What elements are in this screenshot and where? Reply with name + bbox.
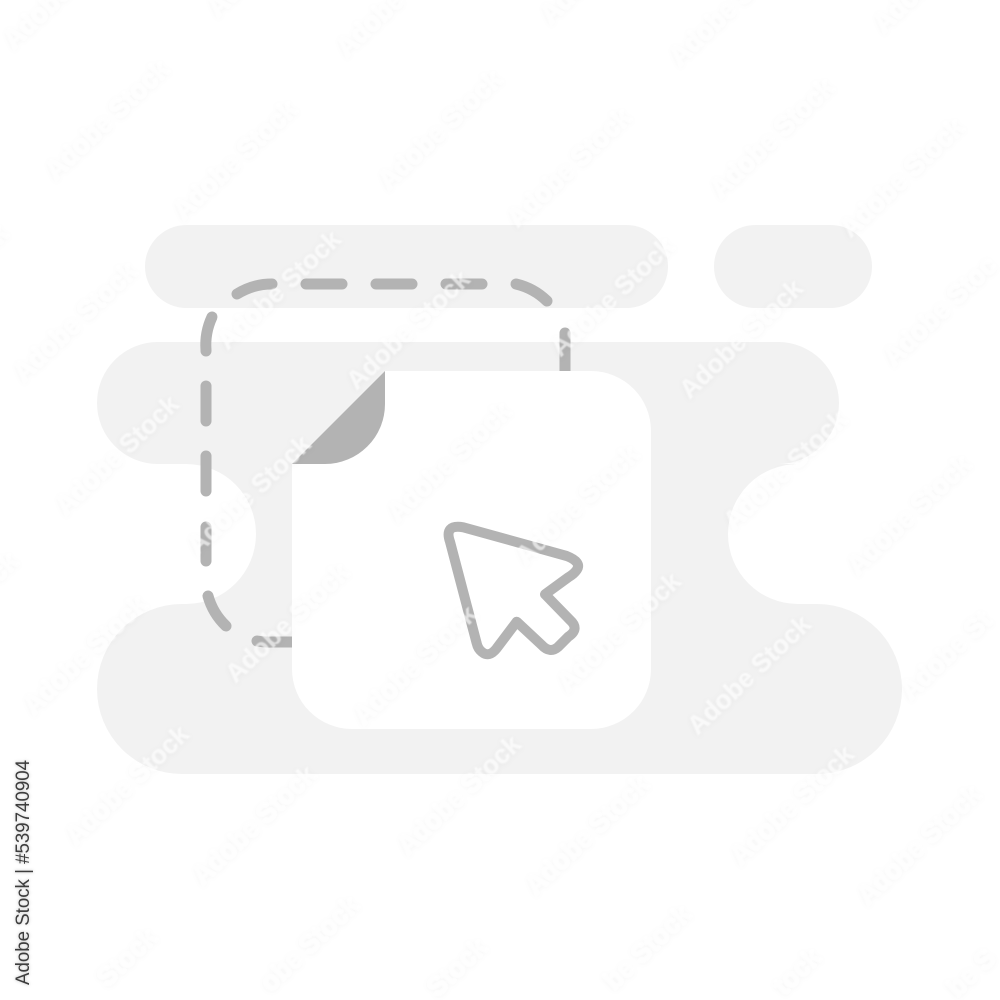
background pill: top left	[145, 225, 668, 308]
watermark pattern: Stock	[91, 921, 163, 992]
watermark pattern: Adobe Stock	[673, 272, 809, 404]
watermark pattern: Adobe Stock	[181, 428, 317, 560]
watermark pattern: Adobe Stock	[551, 565, 687, 697]
watermark pattern: Adobe Stock	[211, 223, 347, 355]
dashed selection outline	[206, 284, 565, 642]
watermark pattern: Adobe Stock	[717, 403, 853, 535]
watermark pattern: Adobe Stock	[509, 438, 645, 570]
watermark pattern: Adobe Stock	[219, 556, 355, 688]
icon: mouse cursor arrow	[449, 527, 578, 654]
watermark pattern: Adobe Stock	[17, 588, 153, 720]
watermark pattern: obe Stock	[254, 889, 365, 997]
watermark pattern: Adobe Stock	[372, 63, 508, 195]
watermark pattern: Adobe Stock	[851, 778, 987, 910]
watermark pattern: be Stock	[598, 898, 697, 995]
watermark pattern: Adobe Stock	[49, 388, 185, 520]
watermark pattern: Adobe Stoc	[877, 250, 1000, 371]
watermark pattern: Adobe Stock	[39, 53, 175, 185]
watermark pattern: Adobe Stock	[519, 768, 655, 900]
watermark pattern: Adobe St	[894, 605, 997, 705]
watermark pattern: Adobe Stock	[704, 71, 840, 203]
watermark pattern: Adobe Stock	[724, 738, 860, 870]
watermark pattern: Adobe Stock	[186, 758, 322, 890]
watermark pattern: Adobe Stock	[340, 263, 476, 395]
watermark pattern: Adobe Stock	[347, 598, 483, 730]
watermark pattern: Adobe Stock	[501, 101, 637, 233]
watermark pattern: Adobe Stock	[544, 230, 680, 362]
watermark pattern: Adobe Stock	[681, 608, 817, 740]
watermark pattern: Adobe Stock	[167, 93, 303, 225]
watermark pattern: Adobe Stock	[59, 718, 195, 850]
watermark pattern: Adobe Stock	[841, 448, 977, 580]
background pill: top right	[714, 225, 872, 308]
folded page corner	[292, 371, 385, 464]
watermark pattern: Adobe Stock	[391, 728, 527, 860]
watermark pattern: Adobe Stock	[381, 395, 517, 527]
watermark pattern: Adobe Stock	[7, 255, 143, 387]
document page	[292, 371, 651, 729]
watermark pattern: Adobe Stock	[834, 111, 970, 243]
background blob	[97, 342, 902, 774]
stock image credit: Adobe Stock | #539740904	[13, 760, 34, 985]
watermark pattern: tock	[767, 941, 827, 1000]
